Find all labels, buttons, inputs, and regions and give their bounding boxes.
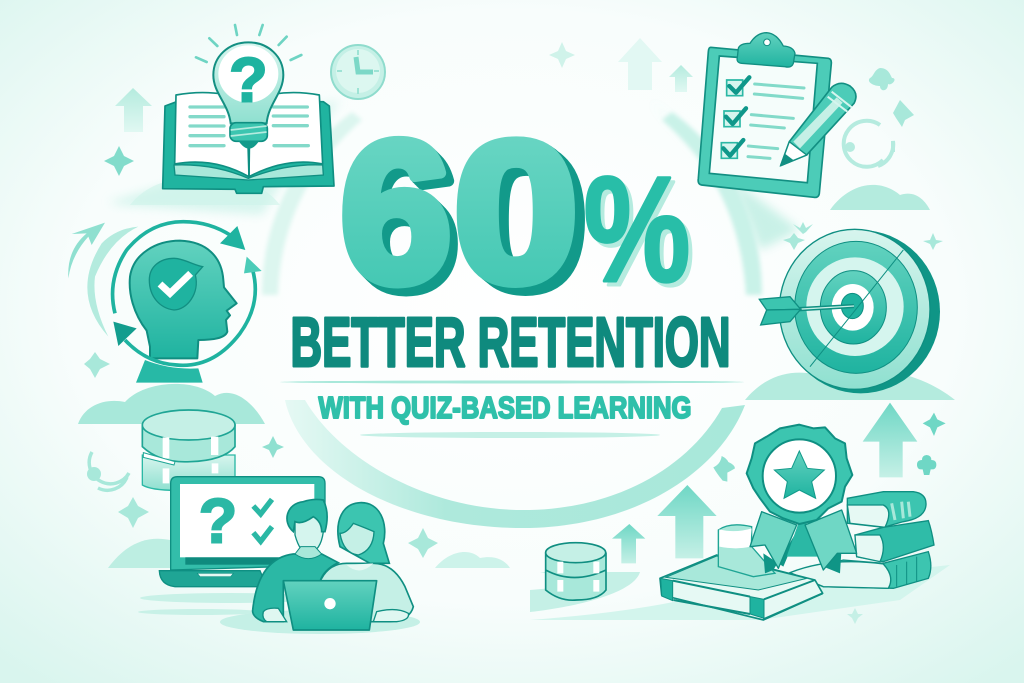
- lower divider: [360, 432, 660, 438]
- percent sign: %: [584, 145, 690, 313]
- small arrows lower right: [612, 403, 946, 563]
- small decorative icons: [84, 38, 943, 624]
- icon: open book with lightbulb: [163, 25, 334, 193]
- digit six: 6: [348, 109, 460, 332]
- digit six: 6: [342, 103, 454, 326]
- icon: laptop with quiz: ?: [199, 487, 237, 557]
- icon: database bottom: [546, 543, 606, 600]
- digit zero: 0: [463, 109, 589, 332]
- icon: clock: [331, 45, 385, 99]
- icon: target with arrow: [759, 229, 940, 393]
- heading: 60%: [340, 101, 694, 332]
- digit zero: 0: [453, 101, 579, 324]
- icon: head with circular arrows: [68, 222, 262, 383]
- background washes and clouds: [78, 100, 955, 634]
- icon: database top: [142, 410, 235, 490]
- digit six: 6: [344, 105, 456, 328]
- digit zero: 0: [458, 105, 584, 328]
- digit zero: 0: [461, 107, 587, 330]
- divider line: [280, 380, 744, 384]
- icon: clipboard with pencil: [698, 33, 856, 197]
- icon: laptop with quiz: [159, 477, 325, 587]
- icon: open book with lightbulb: ?: [229, 45, 268, 115]
- icon: two students with laptop: [253, 499, 413, 630]
- icon: book stack with award ribbon: [660, 425, 934, 620]
- percent sign: %: [588, 149, 694, 317]
- digit six: 6: [346, 107, 458, 330]
- heading: better retention: BETTER RETENTION: [290, 303, 730, 381]
- subheading: with quiz-based learning: WITH QUIZ-BASED LEARNING: [318, 390, 692, 425]
- central ring: [262, 112, 762, 528]
- digit zero: 0: [456, 103, 582, 326]
- digit six: 6: [340, 101, 452, 324]
